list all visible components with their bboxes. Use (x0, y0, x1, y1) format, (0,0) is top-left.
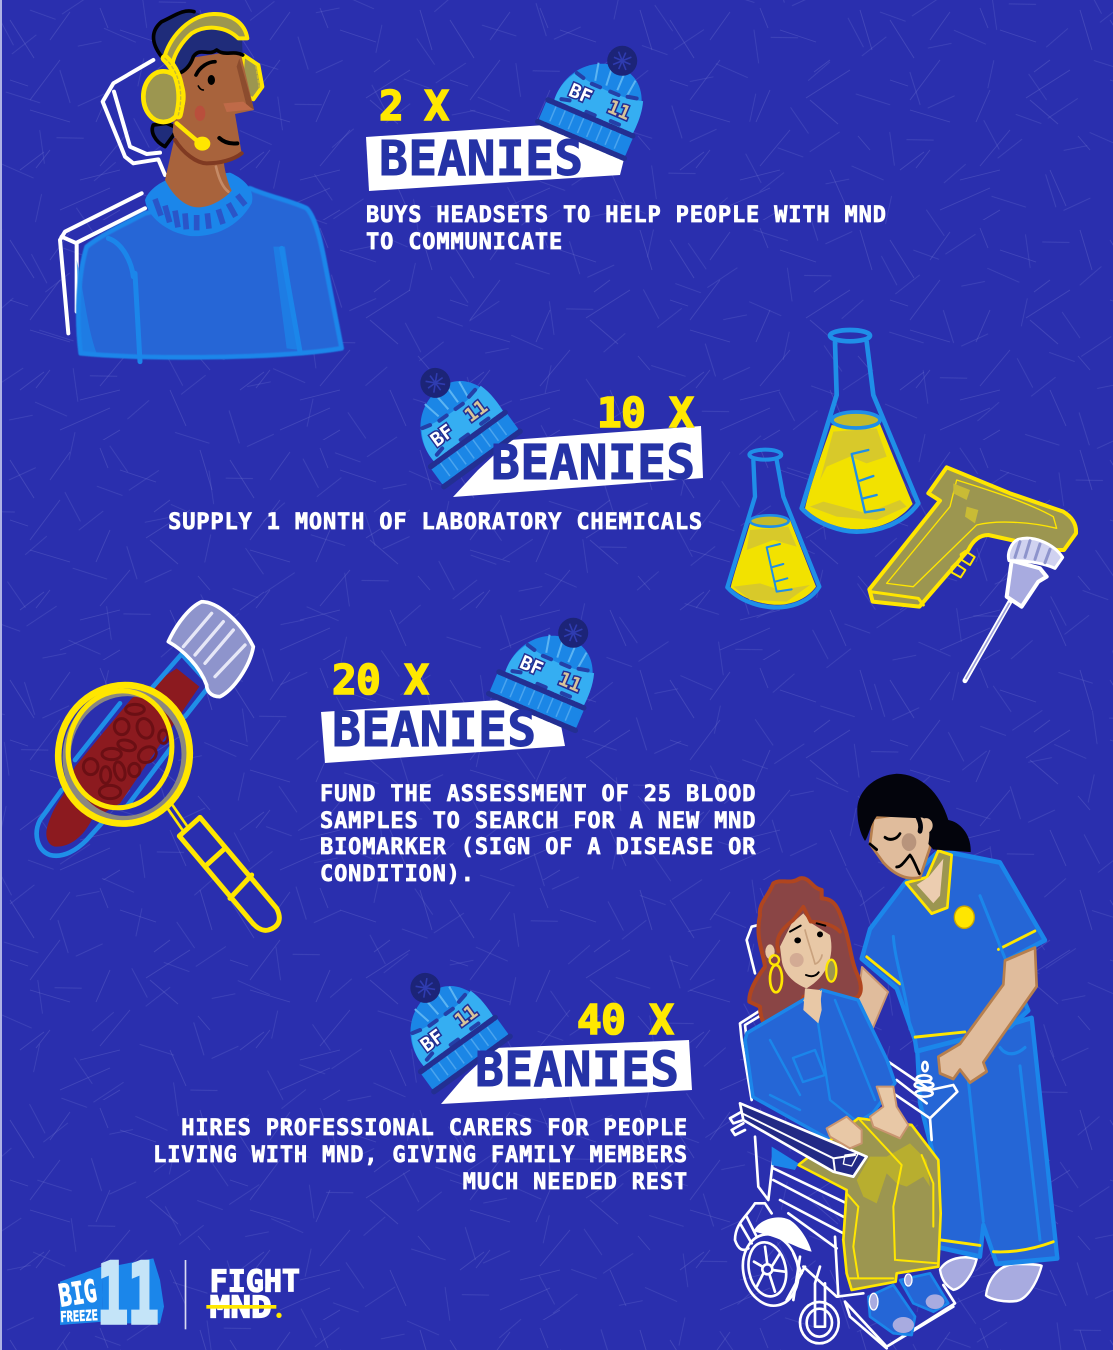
icon: beanie hat: 11 (555, 668, 585, 697)
ribbon (453, 426, 703, 497)
face details (196, 62, 215, 75)
hair (154, 11, 243, 73)
icon: beanie hat: BF (427, 420, 458, 452)
carer back arm (858, 967, 888, 1030)
logo: Fight MND: MND (210, 1290, 272, 1325)
heading: BEANIES (475, 1042, 679, 1098)
description: SUPPLY 1 MONTH OF LABORATORY CHEMICALS (168, 510, 703, 535)
hair back (749, 878, 861, 1037)
large flask (802, 330, 918, 532)
wheelchair (730, 923, 957, 1348)
description: TO COMMUNICATE (366, 230, 563, 255)
ribbon (441, 1040, 692, 1104)
small flask (727, 450, 819, 607)
logo: Big Freeze 11: 11 (97, 1246, 159, 1343)
illustration: person wearing a headset (60, 11, 342, 362)
icon: beanie hat: 11 (461, 396, 492, 427)
description: FUND THE ASSESSMENT OF 25 BLOOD (320, 782, 756, 807)
logos (56, 1246, 300, 1343)
wheel arch (753, 1217, 812, 1252)
heading: BEANIES (491, 435, 695, 491)
heading: BEANIES (332, 702, 536, 758)
carer hair (857, 774, 971, 852)
carer trousers (917, 1018, 1057, 1264)
description: BUYS HEADSETS TO HELP PEOPLE WITH MND (366, 203, 887, 228)
far ear cup (240, 55, 262, 99)
logo: Big Freeze 11: BIG (56, 1274, 99, 1315)
description: MUCH NEEDED REST (463, 1170, 688, 1195)
ribbon (321, 700, 565, 763)
heading: BEANIES (379, 131, 583, 187)
icon: beanie hat (373, 952, 510, 1092)
headset (143, 14, 247, 151)
logo: Fight MND: FIGHT (210, 1265, 300, 1300)
carer shoes (940, 1257, 1042, 1301)
icon: beanie hat (383, 347, 520, 487)
multiplier: 10 X (597, 389, 694, 437)
tube cap (168, 602, 253, 697)
illustration: blood tube and magnifying glass (37, 602, 279, 930)
multiplier: 2 X (379, 82, 449, 130)
handle (170, 807, 279, 930)
pipette gun (869, 467, 1076, 607)
magnifier lens with cells (47, 675, 201, 834)
head and face (765, 907, 840, 1023)
chair outline (60, 60, 165, 333)
carer badge (954, 906, 974, 928)
logo: Big Freeze 11: FREEZE (60, 1306, 98, 1325)
icon: beanie hat: 11 (451, 1001, 482, 1032)
description: CONDITION). (320, 862, 475, 887)
carer (857, 774, 1057, 1301)
multiplier: 40 X (577, 996, 674, 1044)
trousers, armrest and hands (740, 1087, 948, 1335)
icon: beanie hat: BF (516, 651, 546, 681)
row: 2 beanies (366, 26, 887, 255)
divider (185, 1260, 186, 1329)
sweater collar (145, 173, 252, 236)
carer arm (938, 948, 1037, 1083)
blood sample tube (37, 654, 210, 856)
logo: Fight MND (206, 1265, 300, 1325)
pipette tip (965, 538, 1063, 681)
icon: beanie hat (489, 598, 616, 730)
head (173, 50, 254, 163)
person in wheelchair (740, 878, 948, 1335)
back hair (152, 123, 178, 147)
illustration: carer and person in wheelchair (730, 774, 1057, 1348)
sweater (78, 188, 342, 357)
description: BIOMARKER (SIGN OF A DISEASE OR (320, 835, 756, 860)
carer collar (906, 851, 952, 914)
neck (165, 140, 232, 207)
multiplier: 20 X (332, 656, 429, 704)
row: 40 beanies (153, 952, 692, 1195)
description: LIVING WITH MND, GIVING FAMILY MEMBERS (153, 1143, 688, 1168)
row: 10 beanies (168, 347, 703, 535)
row: 20 beanies (320, 598, 756, 887)
ribbon (366, 125, 625, 191)
illustration: flasks and pipette (727, 330, 1076, 681)
shirt (745, 990, 895, 1140)
logo: Big Freeze 11 (56, 1246, 164, 1343)
carer head (870, 811, 933, 878)
icon: beanie hat: 11 (604, 96, 634, 125)
carer tunic (862, 853, 1045, 1051)
description: HIRES PROFESSIONAL CARERS FOR PEOPLE (181, 1116, 688, 1141)
icon: beanie hat: BF (565, 79, 595, 109)
description: SAMPLES TO SEARCH FOR A NEW MND (320, 809, 756, 834)
icon: beanie hat: BF (417, 1025, 448, 1057)
icon: beanie hat (538, 26, 665, 158)
